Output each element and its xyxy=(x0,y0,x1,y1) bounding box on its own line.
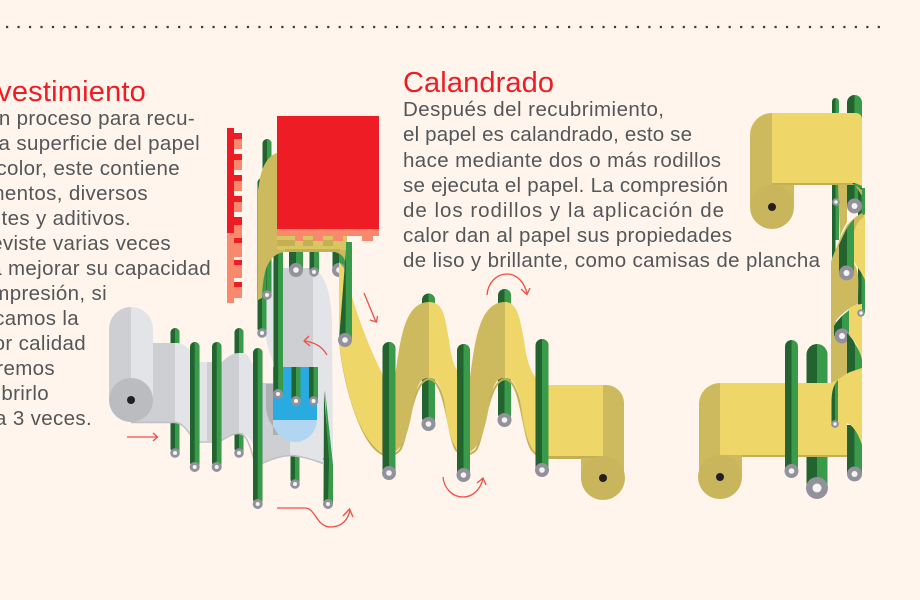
heading: calandrado: Calandrado xyxy=(403,67,554,99)
back rollers: coating xyxy=(170,328,300,489)
body text: revestimiento xyxy=(0,107,211,430)
rollers: coating upper and bath xyxy=(257,139,346,509)
paper web: tan over rollers xyxy=(258,153,347,300)
rollers: calender, middle xyxy=(382,339,549,482)
roller over yellow: coating exit xyxy=(338,242,352,347)
body text: calandrado: hace mediante dos o más rodillos xyxy=(403,149,721,172)
paper web: yellow after coating xyxy=(339,262,603,458)
body text: calandrado xyxy=(403,98,821,272)
arrow: under calender roller xyxy=(443,477,486,497)
text block: calandrado xyxy=(403,67,821,272)
paper roll: yellow, right top xyxy=(750,113,794,229)
body text: calandrado: de los rodillos y la aplicación de xyxy=(403,199,724,222)
text block: revestimiento xyxy=(0,76,211,430)
body text: calandrado: de liso y brillante, como camisas de plancha xyxy=(403,249,821,272)
paper roll: yellow, middle xyxy=(581,385,625,500)
rollers: stack mid xyxy=(834,219,865,402)
paper web: lower yellow xyxy=(720,368,862,457)
coating head: salmon teeth xyxy=(277,229,379,241)
body text: calandrado: el papel es calandrado, esto se xyxy=(403,123,692,146)
small roller: over lower web xyxy=(831,380,839,428)
diagram: coating machine xyxy=(109,95,865,509)
arrow: feed into coater xyxy=(127,433,158,441)
stack roller caps top xyxy=(832,198,862,214)
front roller: right bottom xyxy=(784,340,798,478)
body text: calandrado: calor dan al papel sus propiedades xyxy=(403,224,732,247)
arrow: up around bath xyxy=(304,336,327,355)
arrow: over calender roller xyxy=(487,274,530,295)
side comb: red and salmon xyxy=(227,128,242,303)
paper web: top yellow xyxy=(772,113,862,196)
paper roll: yellow, right bottom xyxy=(698,383,742,499)
paper web: white xyxy=(131,262,333,464)
rollers: behind humps xyxy=(422,289,512,431)
paper web: stack tan and yellow xyxy=(831,185,865,390)
body text: calandrado: se ejecuta el papel. La compresión xyxy=(403,174,728,197)
arrow: under coater xyxy=(277,508,353,527)
back rollers: stack xyxy=(806,95,865,499)
arrow: to calender xyxy=(364,293,378,322)
coating head: red block xyxy=(277,116,379,229)
body text: calandrado: Después del recubrimiento, xyxy=(403,98,664,121)
right section: vertical calender stack xyxy=(698,95,865,499)
ink bath: blue xyxy=(266,367,317,442)
paper roll: white xyxy=(109,307,153,422)
front rollers: coating left xyxy=(190,342,263,509)
